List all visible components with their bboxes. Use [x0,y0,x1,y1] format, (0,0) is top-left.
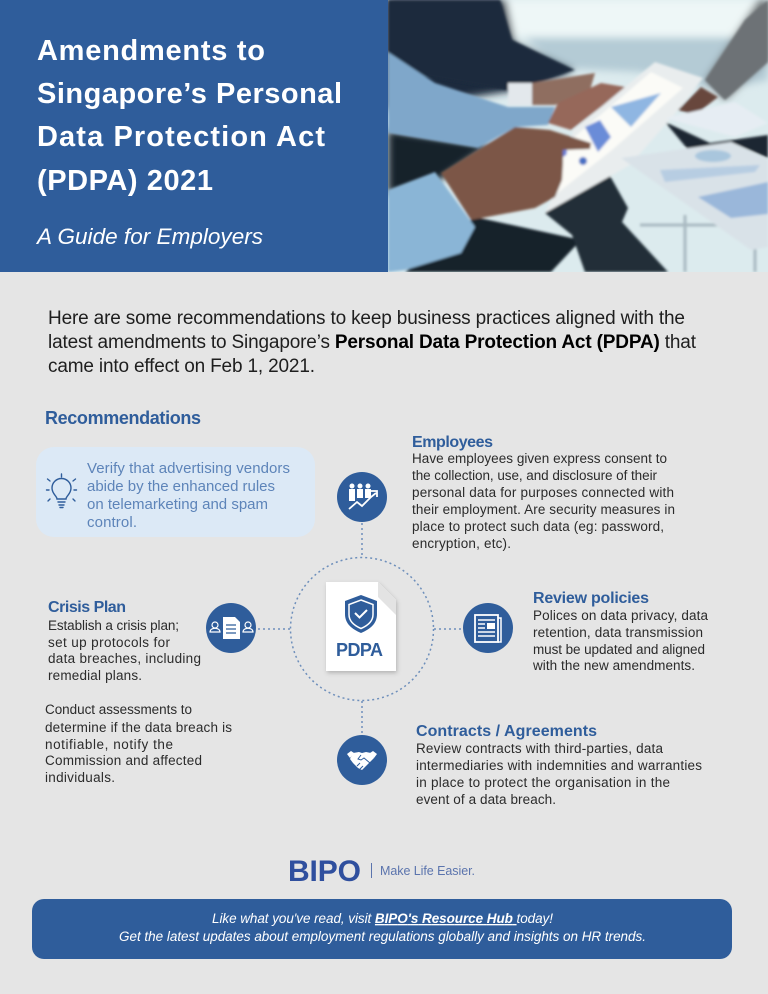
block: Review policies: Polices on data privacy, data [533,608,708,623]
block: Employees: the collection, use, and disclosure of their [412,468,658,483]
dark lower area [405,217,581,272]
callout text: on telemarketing and spam [87,496,268,513]
callout text: Verify that advertising vendors [87,460,290,477]
title: Singapore’s Personal [37,78,342,110]
block: breach assessment: determine if the data breach is [45,720,232,735]
footer banner [32,899,732,959]
right hand [678,87,718,115]
PDPA document [326,582,396,671]
title [37,35,342,197]
intro paragraph [48,308,697,377]
block: breach assessment: individuals. [45,770,115,785]
tablet hand [548,83,625,130]
block: Review policies: must be updated and aligned [533,642,705,657]
footer banner: Get the latest updates about employment regulations globally and insights on HR trends. [119,929,646,944]
subtitle: A Guide for Employers [35,224,263,249]
icon: shield [345,595,377,633]
block: Contracts / Agreements: Review contracts with third-parties, data [416,741,663,756]
title: Data Protection Act [37,121,325,153]
block: Crisis Plan: Crisis Plan [48,599,126,616]
block: breach assessment: Conduct assessments to [45,702,192,717]
block: Review policies: retention, data transmission [533,625,703,640]
callout text: abide by the enhanced rules [87,478,275,495]
intro paragraph: came into effect on Feb 1, 2021. [48,356,315,377]
callout text: control. [87,514,137,531]
block: Contracts / Agreements: intermediaries with indemnities and warranties [416,758,702,773]
icon: handshake [337,735,387,785]
PDPA label: PDPA [336,640,383,660]
heading: Recommendations: Recommendations [45,408,201,428]
BIPO logo [288,855,475,888]
grey sleeve right [705,0,768,100]
header photo: business people with tablet [388,0,768,272]
block: Employees: their employment. Are security measures in [412,502,675,517]
BIPO logo: BIPO [288,855,361,888]
block: Review policies: with the new amendments. [532,658,695,673]
block: Review policies: Review policies [533,590,649,607]
block: Contracts / Agreements: Contracts / Agreements [416,723,597,740]
block: Crisis Plan: set up protocols for [48,635,170,650]
callout text [87,460,290,531]
tablet bar charts [611,93,661,127]
dark table edge [665,122,768,158]
title: Amendments to [37,35,265,67]
panel: advertising vendors callout [36,447,315,537]
block: Crisis Plan: data breaches, including [48,651,201,666]
block: Crisis Plan: remedial plans. [48,668,142,683]
block: Crisis Plan: Establish a crisis plan; [48,618,179,633]
far hand [531,73,595,105]
footer banner: Like what you've read, visit BIPO's Resource Hub today! [212,911,553,926]
block: Employees: personal data for purposes connected with [412,485,674,500]
icon: review policies [463,603,513,653]
dark suit [388,0,575,90]
icon: employees growth [337,472,387,522]
block: breach assessment [45,702,232,785]
white cuff [508,83,532,105]
dark tablet stand [545,167,668,272]
right report [621,142,768,250]
table legs [640,215,755,272]
pointing hand [441,127,591,220]
dashed connectors [257,523,463,735]
block: Employees [412,434,675,551]
block: Employees: Employees [412,434,493,451]
left shirt sleeve [388,52,555,148]
block: Employees: Have employees given express consent to [412,451,667,466]
icon: crisis plan [206,603,256,653]
block: breach assessment: notifiable, notify the [45,737,173,752]
icon: light bulb [46,474,76,508]
header panel [0,0,388,272]
intro paragraph: Here are some recommendations to keep business practices aligned with the [48,308,685,329]
block: Crisis Plan [48,599,201,683]
block: breach assessment: Commission and affected [45,753,202,768]
tablet [545,62,703,213]
intro paragraph: latest amendments to Singapore’s Personal Data Protection Act (PDPA) that [48,332,697,353]
block: Employees: place to protect such data (eg: password, [412,519,664,534]
small paper [665,102,768,137]
block: Contracts / Agreements: in place to protect the organisation in the [416,775,670,790]
block: Employees: encryption, etc). [412,536,511,551]
block: Contracts / Agreements: event of a data breach. [416,792,556,807]
lower cuff [388,172,475,272]
title: (PDPA) 2021 [37,165,213,197]
block: Contracts / Agreements [416,723,702,807]
block: Review policies [532,590,708,673]
BIPO logo: Make Life Easier. [380,864,475,878]
